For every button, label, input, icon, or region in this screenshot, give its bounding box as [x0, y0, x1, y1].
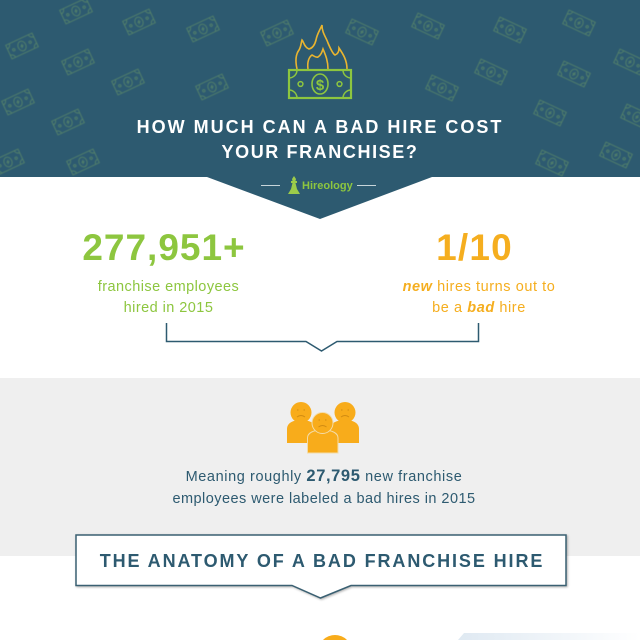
ratio caption: be a bad hire: [432, 300, 526, 316]
result text: employees were labeled a bad hires in 2015: [172, 491, 476, 507]
section heading: anatomy: THE ANATOMY OF A BAD FRANCHISE HIRE: [100, 551, 544, 571]
icon: burning money: $: [316, 77, 325, 94]
header banner: [0, 0, 640, 219]
orange circle, cut off: [318, 635, 352, 640]
ratio caption: new hires turns out to: [403, 279, 555, 295]
stat caption: [98, 279, 239, 316]
header background: [0, 0, 640, 219]
logo lines: [261, 184, 376, 186]
logo: Hireology: [288, 176, 353, 194]
section heading: anatomy: [75, 534, 569, 601]
title: [137, 117, 503, 162]
next panel, cut off: [458, 633, 594, 640]
stat caption: franchise employees: [98, 279, 239, 295]
title: YOUR FRANCHISE?: [221, 142, 418, 162]
ratio caption: [402, 279, 555, 316]
money pattern: [0, 0, 640, 176]
logo: Hireology: Hireology: [302, 180, 353, 192]
stat: employees hired: [82, 227, 246, 316]
ratio number: 1/10: [436, 227, 513, 268]
icon: sad people: [287, 402, 359, 454]
panel: result: [0, 378, 640, 556]
bracket arrow: [166, 323, 480, 352]
icon: burning money: [289, 25, 351, 98]
result text: [172, 467, 476, 507]
stat caption: hired in 2015: [124, 300, 213, 316]
title: HOW MUCH CAN A BAD HIRE COST: [137, 117, 503, 137]
stat: bad hire ratio: [402, 227, 555, 316]
result text: Meaning roughly 27,795 new franchise: [186, 467, 462, 485]
stat number: 277,951+: [82, 227, 246, 268]
